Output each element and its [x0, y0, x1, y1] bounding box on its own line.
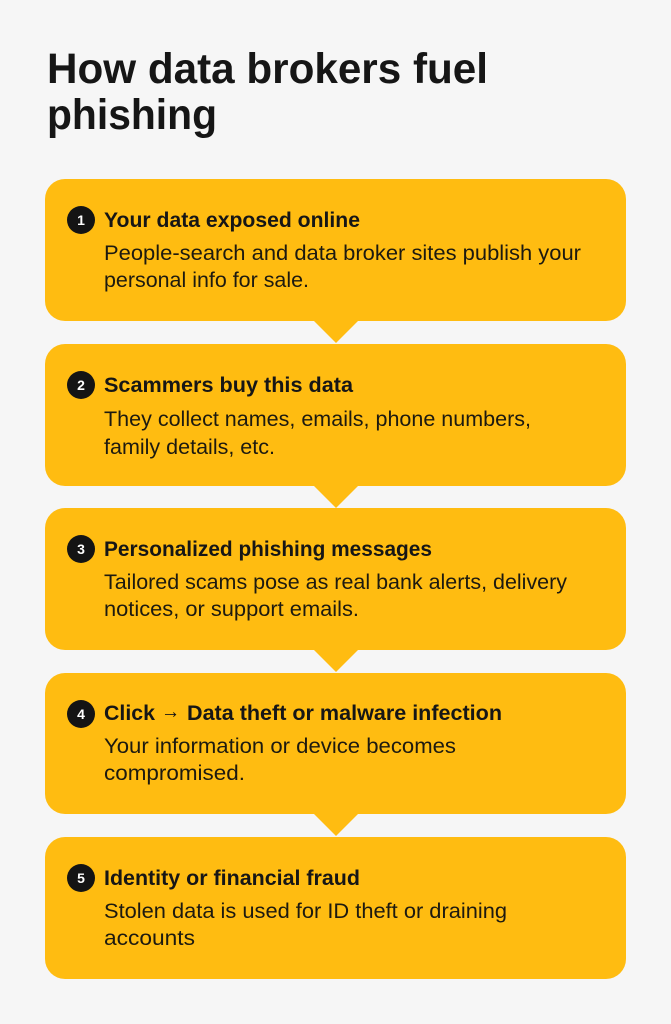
body text 1: personal info for sale. [104, 269, 309, 292]
body text 5: Stolen data is used for ID theft or draining [104, 900, 507, 923]
number badge 3 [67, 535, 95, 563]
body text 4: Your information or device becomes [104, 735, 456, 758]
number badge 1: 1 [77, 212, 85, 228]
title: How data brokers fuel [47, 45, 488, 93]
body text 3: notices, or support emails. [104, 598, 359, 621]
panel: step 5 [45, 837, 626, 979]
body text 3: Tailored scams pose as real bank alerts, delivery [104, 571, 568, 594]
body text 4 [104, 735, 456, 785]
heading 4: Data theft or malware infection [187, 702, 502, 725]
number badge 1 [67, 206, 95, 234]
body text 5: accounts [104, 927, 195, 950]
body text 4: compromised. [104, 762, 245, 785]
heading 4: → [161, 700, 180, 723]
body text 2 [104, 408, 531, 459]
title: phishing [47, 91, 217, 139]
body text 2: They collect names, emails, phone numbers, [104, 408, 531, 431]
body text 5 [104, 900, 507, 950]
heading 2: Scammers buy this data [104, 374, 353, 397]
number badge 4: 4 [77, 706, 85, 722]
number badge 2: 2 [77, 377, 85, 393]
body text 1 [104, 242, 581, 292]
number badge 4 [67, 700, 95, 728]
title [47, 45, 488, 139]
body text 2: family details, etc. [104, 436, 275, 459]
number badge 5: 5 [77, 870, 85, 886]
heading 1: Your data exposed online [104, 209, 360, 232]
heading 3: Personalized phishing messages [104, 538, 432, 561]
number badge 2 [67, 371, 95, 399]
panel: step 3 [45, 508, 626, 672]
heading 4: Click [104, 702, 155, 725]
panel: step 4 [45, 673, 626, 836]
number badge 5 [67, 864, 95, 892]
body text 3 [104, 571, 568, 621]
panel: step 2 [45, 344, 626, 508]
body text 1: People-search and data broker sites publish your [104, 242, 581, 265]
number badge 3: 3 [77, 541, 85, 557]
heading 5: Identity or financial fraud [104, 867, 360, 890]
panel: step 1 [45, 179, 626, 343]
